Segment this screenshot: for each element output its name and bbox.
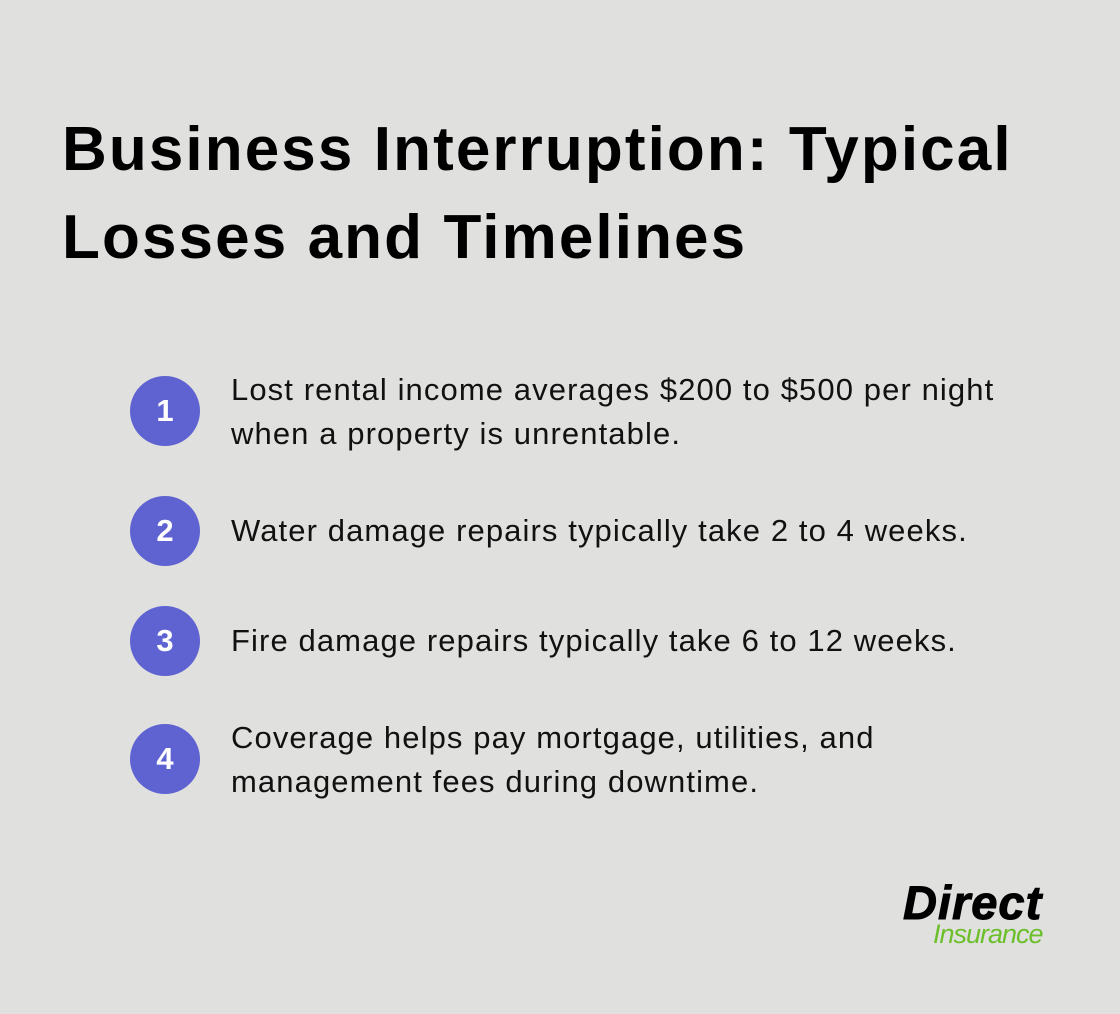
item 3 bbox=[130, 606, 957, 676]
text 4: Coverage helps pay mortgage, utilities, and bbox=[231, 720, 875, 755]
text 2: Water damage repairs typically take 2 to 4 weeks. bbox=[231, 513, 968, 548]
icon: number 2: 2 bbox=[156, 513, 174, 548]
text 4 bbox=[231, 720, 875, 799]
icon: number 3 bbox=[130, 606, 200, 676]
item 2 bbox=[130, 496, 968, 566]
text 4: management fees during downtime. bbox=[231, 764, 759, 799]
icon: number 4: 4 bbox=[156, 741, 174, 776]
title: Losses and Timelines bbox=[62, 203, 747, 272]
icon: number 2 bbox=[130, 496, 200, 566]
text 1 bbox=[231, 372, 994, 451]
icon: number 4 bbox=[130, 724, 200, 794]
icon: number 3: 3 bbox=[156, 623, 174, 658]
logo: Direct bbox=[903, 876, 1042, 929]
logo: Insurance bbox=[933, 919, 1043, 949]
icon: number 1: 1 bbox=[156, 393, 174, 428]
text 1: Lost rental income averages $200 to $500 per night bbox=[231, 372, 994, 407]
text 3: Fire damage repairs typically take 6 to 12 weeks. bbox=[231, 623, 957, 658]
item 4 bbox=[130, 720, 875, 799]
icon: number 1 bbox=[130, 376, 200, 446]
text 1: when a property is unrentable. bbox=[231, 416, 681, 451]
item 1 bbox=[130, 372, 994, 451]
title: Business Interruption: Typical bbox=[62, 115, 1013, 184]
title bbox=[62, 115, 1013, 272]
